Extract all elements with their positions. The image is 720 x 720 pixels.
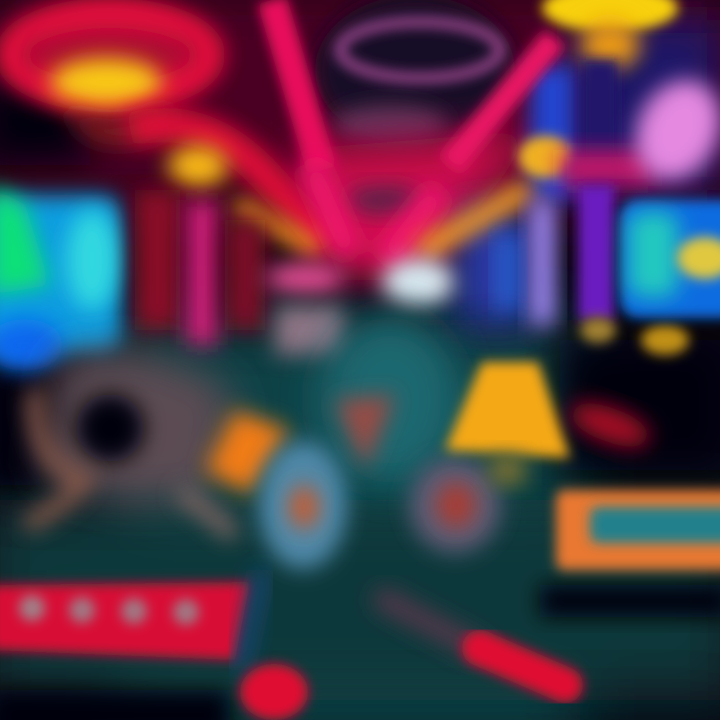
yellow light: top right <box>542 0 678 69</box>
teal centre mass <box>320 315 460 485</box>
neon ring: middle <box>130 125 330 245</box>
neon ring: top left <box>10 8 210 142</box>
red sign: bottom left <box>0 582 250 660</box>
right cyan screen <box>620 200 720 318</box>
central columns <box>135 190 265 345</box>
orange ceiling streak: left <box>235 205 320 250</box>
orange sign: right <box>556 490 720 570</box>
red knob: bottom centre <box>240 664 308 720</box>
pink converging beam <box>310 165 440 260</box>
blue-grey dial <box>259 441 347 569</box>
pink beam: top centre <box>272 0 322 170</box>
orange figure <box>205 410 290 495</box>
brown diamond <box>335 395 395 470</box>
blue strip <box>498 235 518 310</box>
right wall glow <box>455 20 720 325</box>
left cyan screen <box>0 185 122 371</box>
ceiling <box>290 0 540 280</box>
lilac column <box>530 200 555 325</box>
white glow at vanishing point <box>265 258 454 355</box>
yellow light: right <box>518 136 572 178</box>
purple hanging column <box>560 60 689 355</box>
pink blob light <box>620 66 720 194</box>
blue stem <box>240 570 262 670</box>
red glow right <box>565 395 655 455</box>
orange ceiling streak: right <box>420 188 530 252</box>
joystick handle <box>385 600 565 685</box>
grey ring dial <box>409 457 501 553</box>
grey-brown cluster with drum <box>25 351 235 535</box>
pink beam: diagonal right <box>450 38 555 165</box>
yellow lamp <box>445 362 570 485</box>
